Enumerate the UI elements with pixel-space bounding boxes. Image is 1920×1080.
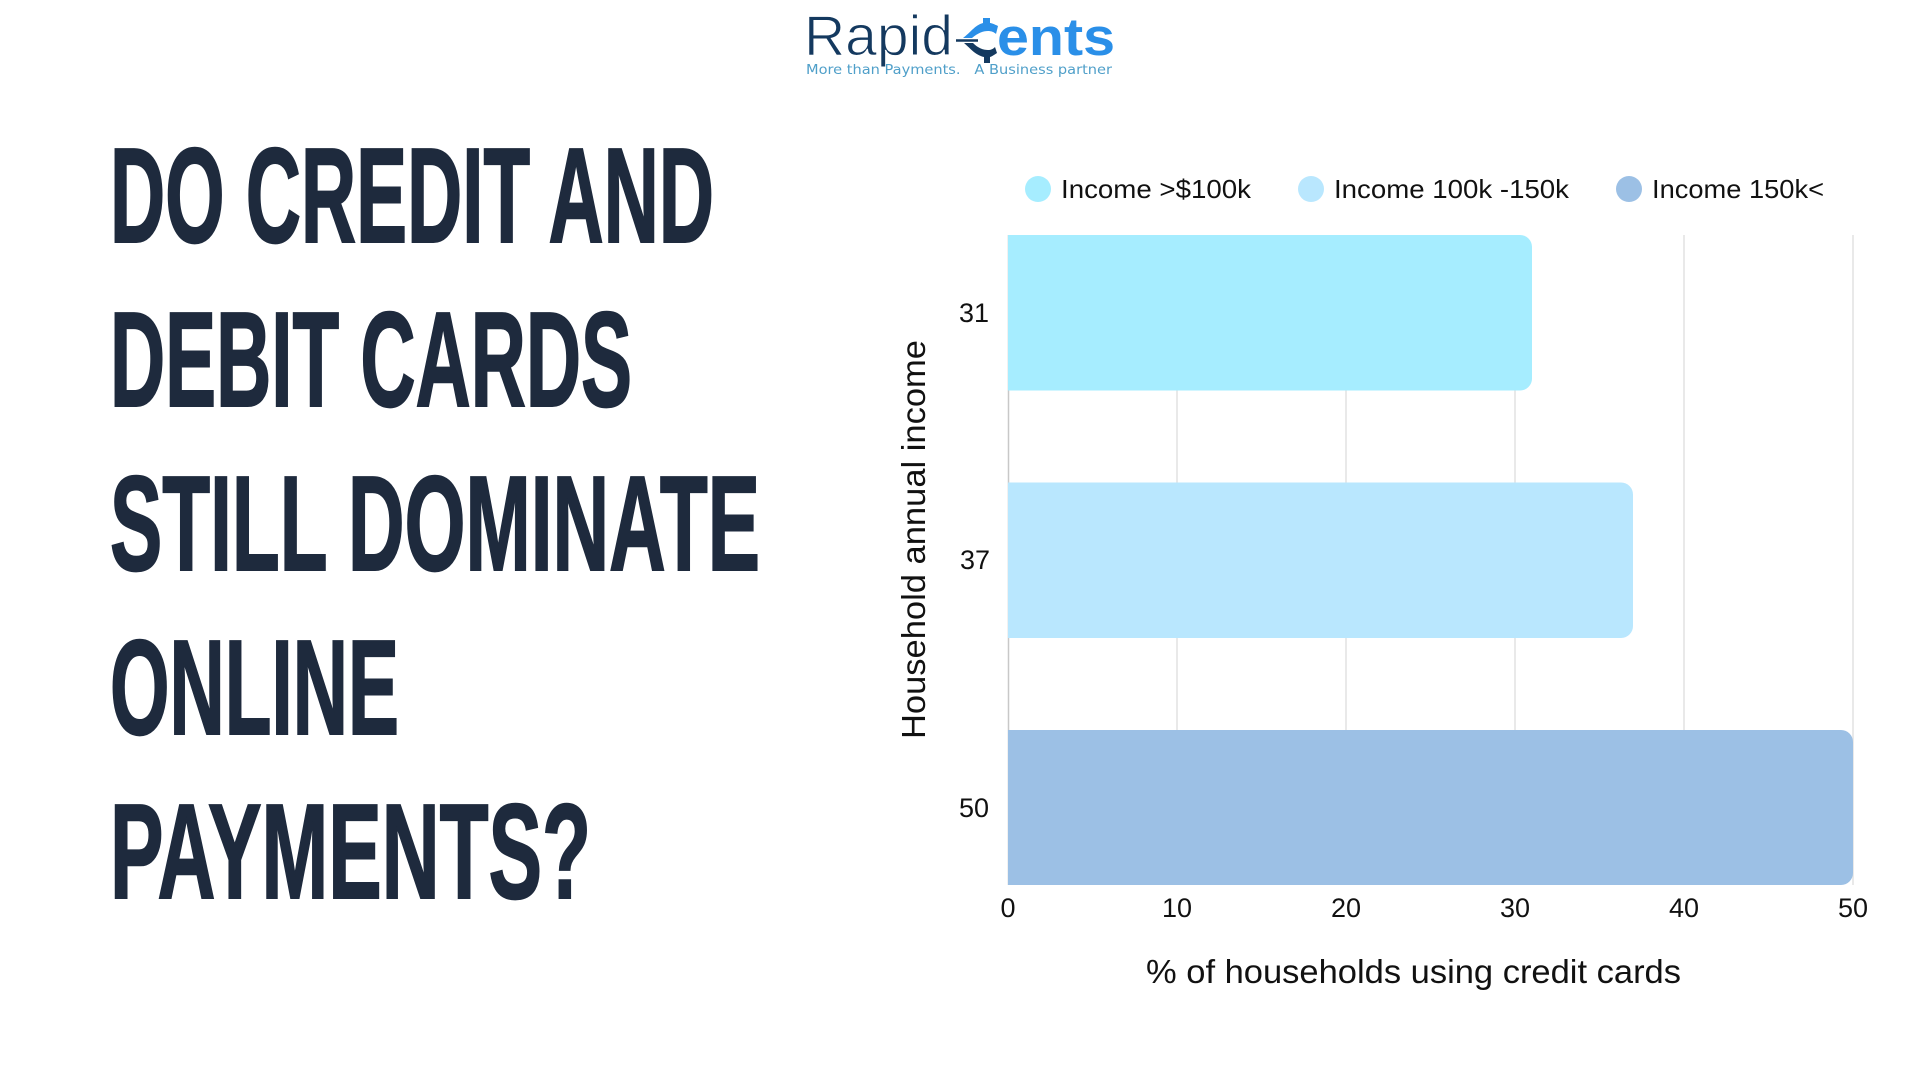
logo: RapidCents xyxy=(804,4,1115,78)
title line 2: DEBIT CARDS xyxy=(110,284,632,435)
logo icon: cent symbol xyxy=(956,18,998,63)
x-axis tick labels: 20 xyxy=(1331,893,1361,923)
x-axis tick labels: 50 xyxy=(1838,893,1868,923)
legend item: income 100k-150k: Income 100k -150k xyxy=(1334,174,1570,204)
legend xyxy=(1025,174,1824,204)
title line 1: DO CREDIT AND xyxy=(110,120,714,271)
title line 5: PAYMENTS? xyxy=(110,776,591,927)
x-axis tick labels: 10 xyxy=(1162,893,1192,923)
bar: 37 xyxy=(1008,482,1633,638)
y-axis category labels xyxy=(959,298,990,823)
x-axis tick labels: 40 xyxy=(1669,893,1699,923)
y-axis title: Household annual income xyxy=(895,340,932,739)
legend item: income 150k<: Income 150k< xyxy=(1652,174,1824,204)
bar: 31 xyxy=(1008,235,1532,390)
y-axis category labels: 37 xyxy=(960,545,990,575)
title: do credit and debit cards still dominate online payments? xyxy=(110,120,760,927)
legend item: income >$100k: Income >$100k xyxy=(1061,174,1252,204)
x-axis tick labels: 0 xyxy=(1000,893,1016,923)
bar: 50 xyxy=(1008,730,1853,885)
bar chart: households using credit cards xyxy=(895,235,1868,990)
x-axis title: % of households using credit cards xyxy=(1146,953,1681,990)
x-axis tick labels xyxy=(1000,893,1868,923)
title line 4: ONLINE xyxy=(110,612,399,763)
y-axis category labels: 50 xyxy=(959,793,989,823)
logo wordmark: Rapid: Rapid xyxy=(804,4,953,68)
logo tagline: More than Payments. A Business partner xyxy=(806,62,1112,78)
title line 3: STILL DOMINATE xyxy=(110,448,760,599)
x-axis tick labels: 30 xyxy=(1500,893,1530,923)
y-axis category labels: 31 xyxy=(959,298,989,328)
logo wordmark: ents: ents xyxy=(997,8,1115,67)
